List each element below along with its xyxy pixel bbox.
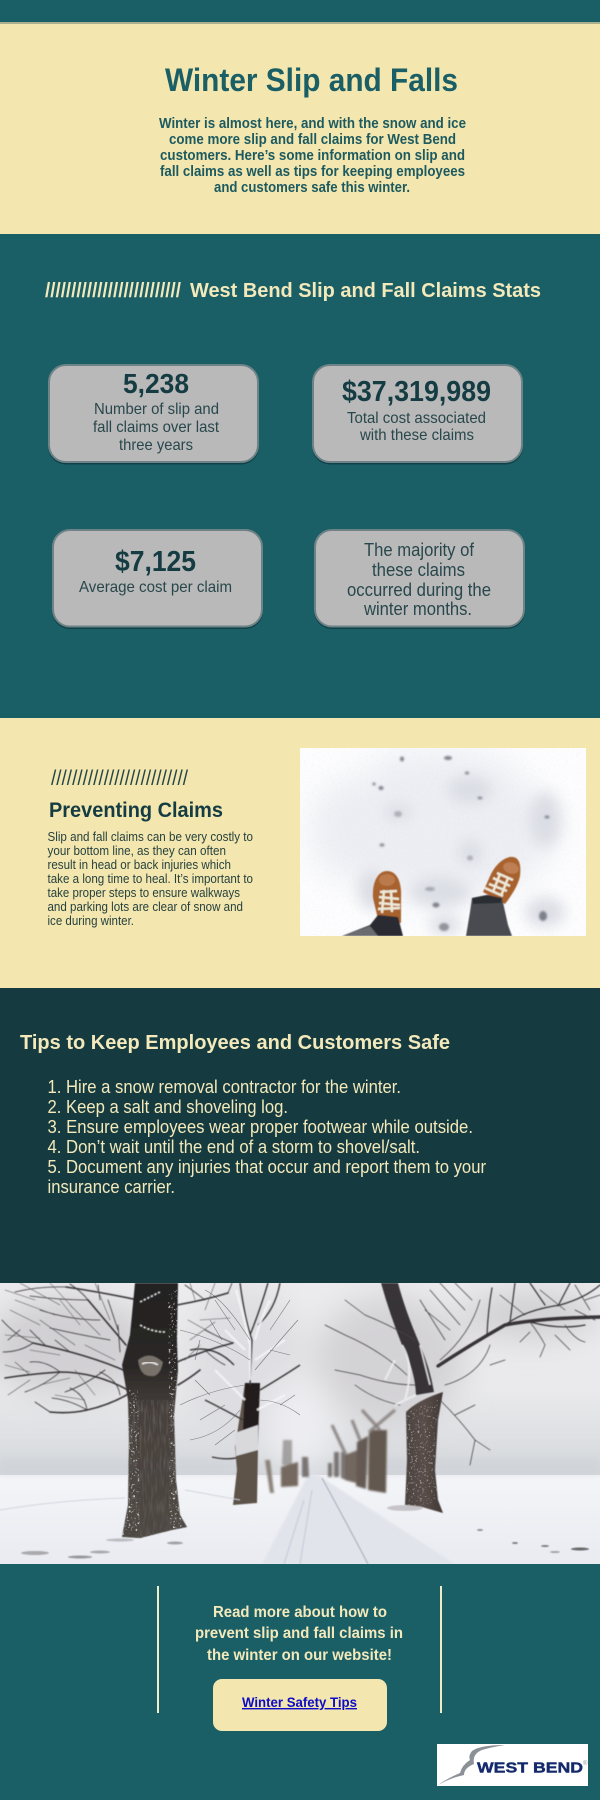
logo: West Bend: ® [583,1760,588,1767]
tips list: insurance carrier. [48,1177,175,1197]
vertical rule left [157,1586,159,1713]
left trouser [342,915,403,936]
call to action text: the winter on our website! [207,1647,392,1664]
photo: boots in snow [300,748,586,936]
call to action text: Read more about how to [213,1604,387,1621]
logo: West Bend [437,1744,588,1786]
stat card: winter months: winter months. [363,598,472,619]
stat card: claim count: three years [119,437,193,454]
logo: West Bend: WEST BEND [477,1760,583,1776]
tips list: 2. Keep a salt and shoveling log. [48,1097,288,1117]
panel: intro [0,22,600,234]
body text: take proper steps to ensure walkways [48,886,240,900]
vertical rule right [440,1586,442,1713]
snow debris [21,1529,589,1558]
call to action text [195,1604,403,1664]
body text: result in head or back injuries which [48,858,231,872]
body text: ice during winter. [48,914,134,928]
button: winter safety tips [213,1679,387,1731]
right tree frost [385,1345,430,1405]
slashes decoration: preventing: ////////////////////////// [51,767,188,790]
photo: snowy tree-lined road [0,1283,600,1564]
intro text: come more slip and fall claims for West Bend [169,132,456,148]
intro text [159,116,466,196]
tips list: 5. Document any injuries that occur and report them to your [48,1157,486,1177]
stat card: total cost: $37,319,989 [342,376,491,408]
right tree branches [325,1283,600,1465]
body text: and parking lots are clear of snow and [48,900,243,914]
tips list [48,1077,486,1197]
intro text: customers. Here’s some information on slip and [160,148,465,164]
tips list: 1. Hire a snow removal contractor for the winter. [48,1077,401,1097]
stat card: winter months [314,530,525,629]
right tree trunk [387,1392,443,1513]
heading: preventing claims: Preventing Claims [49,798,223,822]
panel: tips [0,988,600,1283]
stat card: total cost: Total cost associated [347,410,486,427]
road [270,1476,437,1554]
left tree branches [2,1283,233,1413]
body text: Slip and fall claims can be very costly to [48,830,253,844]
body text: your bottom line, as they can often [48,844,226,858]
stat card: winter months: these claims [372,559,465,580]
heading: tips: Tips to Keep Employees and Customers Safe [20,1031,450,1054]
right boot [483,857,520,904]
panel: stats [0,234,600,718]
intro text: Winter is almost here, and with the snow and ice [159,116,466,132]
stat card: average cost: $7,125 [115,546,196,578]
panel: preventing claims [0,718,600,988]
right trouser [466,895,512,936]
stat card: average cost [52,530,263,629]
stat card: claim count: 5,238 [123,368,189,399]
title: Winter Slip and Falls [165,62,458,98]
call to action text: prevent slip and fall claims in [195,1625,403,1642]
stat card: claim count [48,365,259,464]
left tree trunk [122,1283,187,1538]
stat card: claim count: fall claims over last [93,419,220,436]
tips list: 4. Don’t wait until the end of a storm to shovel/salt. [48,1137,420,1157]
stat card: average cost: Average cost per claim [79,579,232,596]
tips list: 3. Ensure employees wear proper footwear while outside. [48,1117,473,1137]
panel: call to action [0,1564,600,1800]
second tree [190,1283,300,1505]
stat card: winter months: The majority of [364,539,475,560]
intro text: and customers safe this winter. [214,180,410,196]
left boot [373,871,401,923]
stat card: claim count: Number of slip and [94,401,219,418]
stat card: total cost: with these claims [359,427,474,444]
body text [48,830,253,928]
intro text: fall claims as well as tips for keeping employees [160,164,465,180]
stat card: winter months: occurred during the [347,579,491,600]
second tree fine branches [180,1290,300,1445]
body text: take a long time to heal. It’s important to [48,872,253,886]
button: winter safety tips: Winter Safety Tips [242,1694,357,1710]
background trees [265,1410,395,1493]
top band [0,0,600,24]
stat card: total cost [312,365,523,464]
heading: stats: West Bend Slip and Fall Claims Stats [190,279,541,302]
slashes decoration: stats heading: ////////////////////////// [45,280,181,302]
